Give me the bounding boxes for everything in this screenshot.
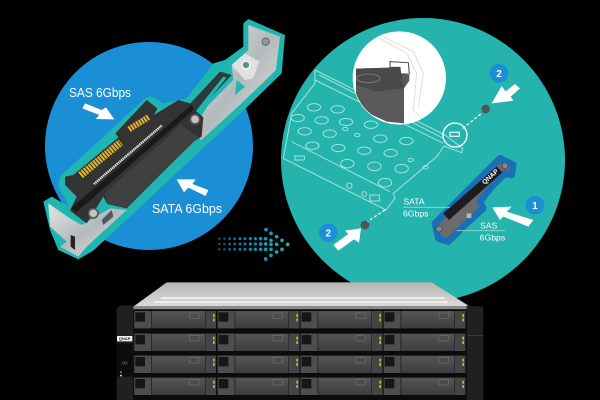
badge 1 [526,196,544,215]
label: SAS 6Gbps [480,221,506,243]
left ear: QNAP [119,336,131,341]
label: SAS 6Gbps: 6Gbps [480,233,506,243]
drive bays [134,311,465,395]
arrow: SATA [177,179,208,196]
screws [89,209,98,218]
badge 2 bottom: 2 [326,228,332,239]
front panel [133,309,467,400]
label: SATA 6Gbps: SATA 6Gbps [152,202,222,216]
blue circle panel: connector [43,19,285,259]
dashed guide lines [367,114,481,222]
module SATA leader lines [403,207,505,231]
gold contacts [81,142,121,175]
connector photo [43,19,285,259]
arrow top [492,84,520,103]
lower bracket [48,203,127,257]
screw bottom [361,221,369,229]
label: SAS 6Gbps: SAS 6Gbps [69,86,131,100]
badge 2 top: 2 [496,69,502,80]
label: SAS 6Gbps: SAS [480,221,498,231]
top lid [133,282,470,307]
badge 1: 1 [532,201,538,212]
dotted arrow [218,228,289,261]
teal outline [43,19,285,259]
left ear [117,306,133,400]
label: SATA 6Gbps [403,197,429,218]
badge 2 top [490,64,508,83]
adapter module [435,158,513,242]
slot [94,125,162,184]
label: SATA 6Gbps: SATA [403,197,425,207]
teal circle panel: installation [281,18,565,302]
screw top [481,105,490,113]
arrow module [492,207,533,227]
arrow: SAS [82,103,114,119]
right ear [467,306,483,400]
arrow bottom [333,228,361,251]
zoomed detail circle [353,31,446,125]
tray line drawing [283,70,463,210]
connector body [65,100,203,223]
NAS enclosure [117,282,483,400]
label: SATA 6Gbps: 6Gbps [403,208,429,218]
module logo: QNAP [481,168,501,186]
highlight ring [443,123,467,147]
badge 2 bottom [319,223,338,242]
upper bracket [196,25,280,141]
